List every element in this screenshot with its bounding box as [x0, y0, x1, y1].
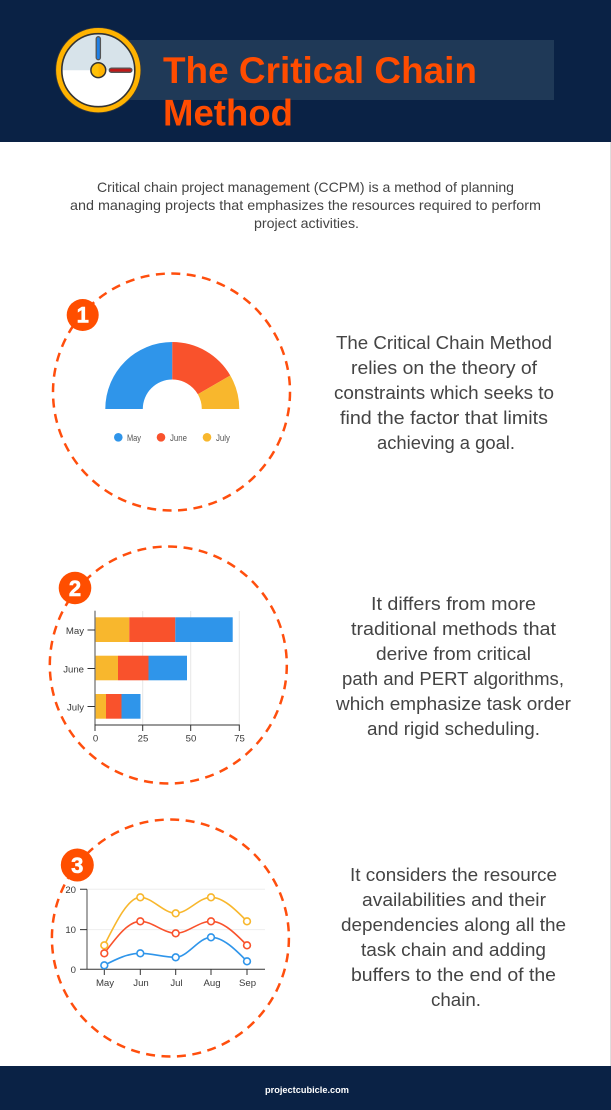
panel: step 1 donut chart	[53, 274, 290, 510]
text block: step 3: chain.	[431, 989, 481, 1010]
text block: step 1: achieving a goal.	[377, 432, 515, 453]
text block: step 1	[334, 332, 554, 453]
text block: step 2: and rigid scheduling.	[367, 718, 540, 739]
line chart: Sep	[239, 978, 256, 989]
bar chart: June	[63, 664, 84, 676]
intro text	[70, 179, 541, 231]
text block: step 2: path and PERT algorithms,	[342, 668, 564, 689]
header banner	[0, 0, 611, 142]
line chart: 0	[71, 965, 76, 976]
pie chart: semicircle	[105, 342, 239, 409]
badge 3	[61, 848, 94, 882]
text block: step 2: It differs from more	[371, 593, 536, 614]
badge 1	[67, 299, 99, 331]
legend: July	[216, 433, 230, 443]
text block: step 1: constraints which seeks to	[334, 382, 554, 403]
line chart	[65, 885, 265, 989]
title: The Critical Chain	[163, 50, 477, 91]
bar chart: 25	[138, 734, 148, 744]
text block: step 2: derive from critical	[376, 643, 531, 664]
bar chart: 75	[234, 734, 245, 744]
title: Method	[163, 92, 293, 134]
footer	[0, 1066, 611, 1110]
intro text: and managing projects that emphasizes the resources required to perform	[70, 197, 541, 213]
title	[163, 50, 477, 134]
intro text: Critical chain project management (CCPM) is a method of planning	[97, 179, 514, 195]
intro text: project activities.	[254, 215, 359, 231]
legend	[114, 433, 230, 443]
line chart: 20	[65, 885, 76, 896]
panel: step 2 bar chart	[50, 546, 287, 784]
bar chart: 50	[186, 734, 196, 744]
legend: May	[127, 433, 141, 443]
text block: step 3: buffers to the end of the	[351, 964, 556, 985]
footer: projectcubicle.com	[265, 1085, 349, 1096]
text block: step 3: dependencies along all the	[341, 914, 566, 935]
badge 2: 2	[69, 576, 81, 601]
badge 2	[59, 572, 91, 604]
bar chart	[63, 611, 245, 744]
line chart: Jun	[133, 978, 149, 989]
panel: step 3 line chart	[52, 820, 289, 1056]
text block: step 2	[335, 593, 571, 739]
bar chart: July	[67, 702, 84, 714]
line chart: May	[96, 978, 114, 989]
bar chart: May	[66, 626, 84, 637]
icon: clock	[56, 28, 141, 113]
text block: step 1: find the factor that limits	[340, 407, 548, 428]
bar chart: 0	[93, 734, 98, 744]
text block: step 3: task chain and adding	[361, 939, 546, 960]
text block: step 3: availabilities and their	[362, 889, 546, 910]
text block: step 1: The Critical Chain Method	[336, 332, 552, 353]
line chart: Aug	[203, 978, 221, 989]
text block: step 2: traditional methods that	[351, 618, 556, 639]
text block: step 1: relies on the theory of	[351, 357, 538, 378]
text block: step 3: It considers the resource	[350, 864, 557, 885]
badge 1: 1	[77, 302, 89, 328]
line chart: Jul	[170, 978, 183, 989]
badge 3: 3	[71, 853, 83, 878]
legend: June	[170, 433, 187, 443]
text block: step 2: which emphasize task order	[335, 693, 571, 714]
text block: step 3	[341, 864, 566, 1010]
line chart: 10	[65, 925, 76, 936]
